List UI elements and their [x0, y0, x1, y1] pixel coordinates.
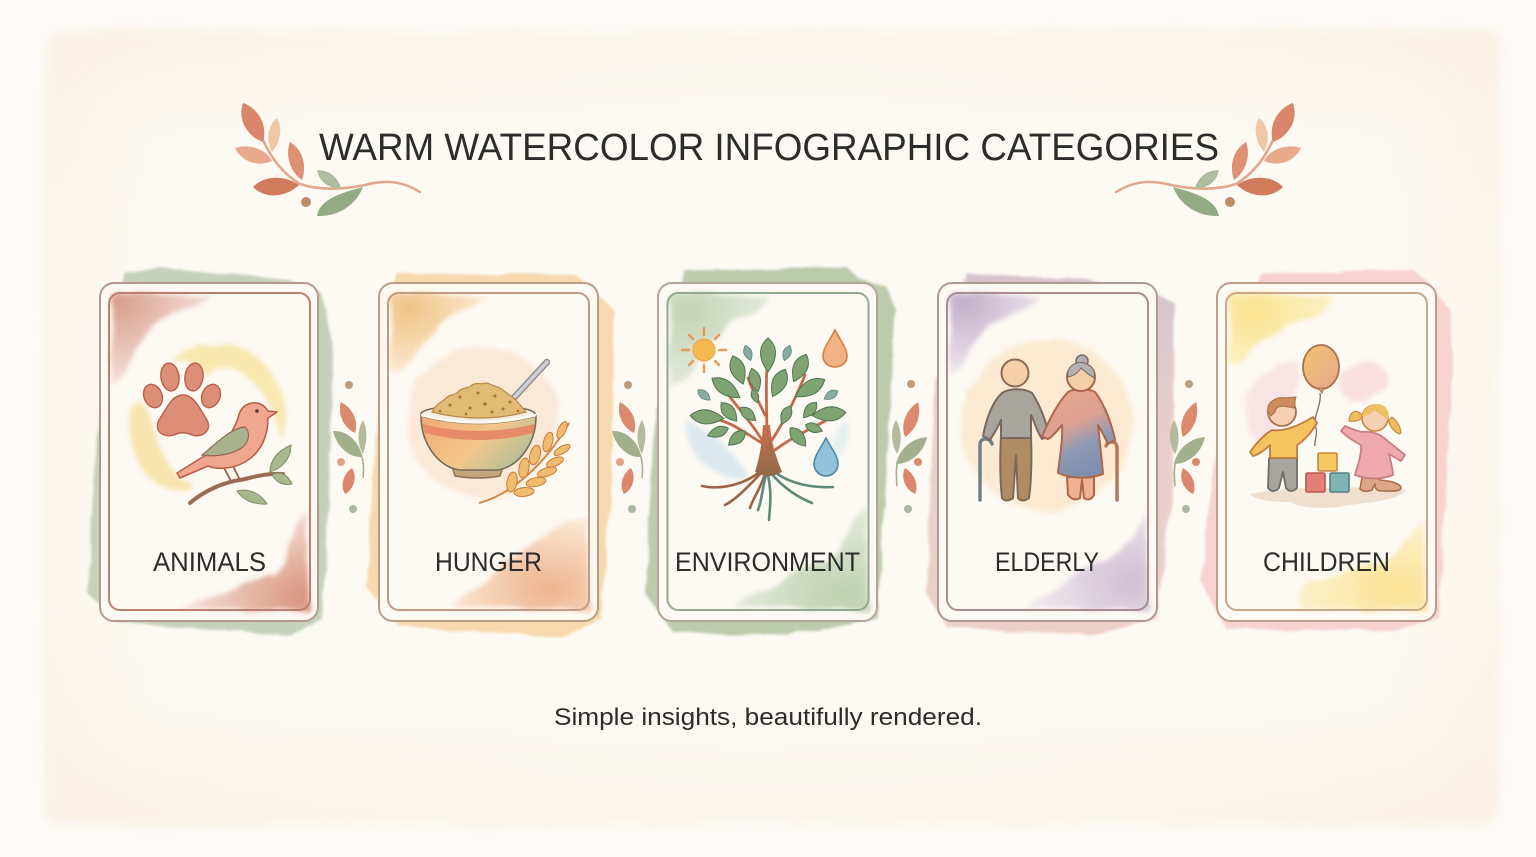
- card: animals: [87, 267, 333, 635]
- left title sprig: [235, 103, 420, 216]
- connector ornament 3: [892, 380, 927, 513]
- right title sprig: [1116, 103, 1301, 216]
- card: elderly: [926, 273, 1174, 635]
- label: environment: ENVIRONMENT: [675, 547, 860, 577]
- icon: grain bowl and wheat: [408, 348, 572, 503]
- connector ornament 4: [1170, 380, 1205, 513]
- connector ornament 1: [333, 381, 366, 513]
- icon: elderly couple with canes: [961, 339, 1133, 511]
- title heading: WARM WATERCOLOR INFOGRAPHIC CATEGORIES: [319, 127, 1219, 169]
- caption: Simple insights, beautifully rendered.: [554, 704, 982, 731]
- label: elderly: ELDERLY: [995, 547, 1099, 577]
- label: hunger: HUNGER: [435, 547, 542, 577]
- card: children: [1200, 270, 1453, 630]
- connector ornament 2: [612, 381, 645, 513]
- label: animals: ANIMALS: [153, 547, 266, 577]
- icon: paw and bird: [131, 344, 292, 504]
- label: children: CHILDREN: [1263, 547, 1390, 577]
- card: hunger: [366, 273, 614, 637]
- icon: tree with sun and water drops: [682, 328, 850, 520]
- card: environment: [645, 267, 895, 635]
- icon: children with balloon and blocks: [1245, 345, 1406, 508]
